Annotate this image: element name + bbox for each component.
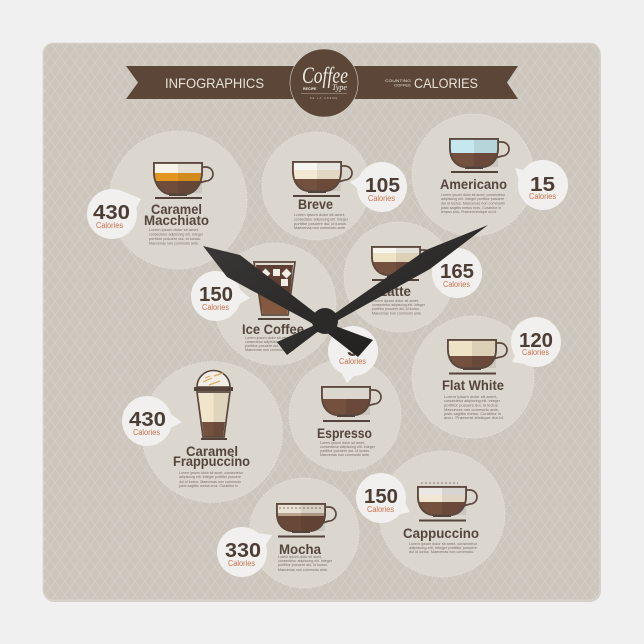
icon: frappuccino glass [194, 370, 233, 440]
description: consectetur adipiscing elit. Integer [320, 445, 376, 449]
description: Lorem ipsum dolor sit amet, [320, 441, 365, 445]
label: Breve [298, 196, 333, 212]
calorie bubble: 330: 330 [225, 540, 261, 562]
calorie bubble: 430: 430 [93, 202, 130, 224]
description: dui id luctus. Maecenas non commodo [441, 202, 505, 206]
calorie bubble: 120: Calories [522, 348, 549, 357]
calorie bubble: 105: 105 [365, 175, 400, 197]
calorie bubble: 150: 150 [199, 284, 233, 306]
description: porttitor posuere dui, id luctus. [372, 307, 420, 311]
description: tempus arcu. Praesent tristique dui id. [441, 210, 497, 214]
label: Caramel [151, 201, 202, 217]
label: Americano [440, 176, 507, 192]
label: Latte [379, 283, 411, 299]
panel: Caramel Macchiato [87, 131, 247, 269]
heading: counting coffee calories: COFFEE [394, 84, 412, 88]
logo badge: DE LA CREME [310, 96, 338, 100]
description [409, 542, 478, 554]
description: consectetur adipiscing elit. Integer [294, 218, 349, 222]
description: consectetur adipiscing elit. Integer [444, 399, 501, 403]
icon: breve cup [292, 161, 352, 197]
calorie bubble: 105 [350, 162, 407, 212]
calorie bubble: 165 [426, 248, 482, 298]
icon: latte cup [371, 246, 431, 281]
description: Lorem ipsum dolor sit amet, [372, 299, 419, 303]
label: Mocha [279, 541, 321, 557]
calorie bubble: 120 [511, 317, 561, 367]
center hub [312, 308, 338, 334]
description [320, 441, 376, 457]
logo badge: Type [332, 83, 347, 92]
description: Lorem ipsum dolor sit amet, consectetur [441, 193, 506, 197]
label: Ice Coffee [242, 321, 304, 337]
calorie bubble: 330: Calories [228, 559, 255, 568]
description: porttitor posuere dui, id luctus. [149, 237, 201, 241]
description: consectetur adipiscing elit. Integer [245, 340, 298, 344]
description: justo sagittis metus eros. Curabitur in [440, 206, 501, 210]
calorie bubble: 120: 120 [519, 330, 553, 352]
label: Espresso [317, 425, 372, 441]
description: consectetur adipiscing elit. Integer [149, 232, 204, 236]
description: dui id luctus. Maecenas non commodo. [409, 550, 474, 554]
clock hands [203, 225, 488, 357]
description: porttitor posuere dui, id luctus. [294, 222, 347, 226]
logo badge [290, 49, 358, 117]
panel: Breve [262, 132, 407, 240]
description: adipiscing elit. Integer porttitor posuere [441, 197, 504, 201]
panel: Ice Coffee [191, 243, 336, 365]
description: Maecenas non commodo ante. [444, 408, 499, 412]
icon: cappuccino cup [417, 483, 477, 522]
icon: caramel macchiato cup [153, 162, 213, 199]
description: Lorem ipsum dolor sit amet, consectetur [179, 471, 244, 475]
description [178, 471, 244, 488]
icon: americano cup [449, 138, 509, 173]
calorie bubble: 5: 5 [347, 339, 358, 361]
icon: espresso cup [321, 386, 381, 422]
description: Lorem ipsum dolor sit amet, [245, 336, 291, 340]
description [294, 213, 349, 230]
description: adipiscing elit. Integer porttitor posuere [179, 475, 241, 479]
panel: Caramel Macchiato: Macchiato [144, 212, 209, 228]
icon: iced coffee glass [254, 262, 295, 320]
panel: Cappuccino [356, 451, 505, 577]
description: porttitor posuere dui, id luctus. [444, 404, 499, 408]
description: Maecenas non commodo ante. [149, 242, 199, 246]
calorie bubble: 150: Calories [367, 505, 394, 514]
calorie bubble: 165: Calories [443, 280, 470, 289]
heading: infographics: INFOGRAPHICS [165, 76, 264, 91]
icon: mocha cup [276, 503, 336, 538]
description [149, 228, 204, 246]
description: Lorem ipsum dolor sit amet, [444, 395, 497, 399]
calorie bubble: 150 [356, 473, 410, 523]
description: justo sagittis metus eros. Curabitur in [178, 484, 238, 488]
heading: counting coffee calories: COUNTING [385, 79, 411, 83]
panel: Americano [412, 114, 568, 236]
calorie bubble: 15: Calories [529, 192, 556, 201]
description: Lorem ipsum dolor sit amet, consectetur [409, 542, 478, 546]
panel: Flat White [412, 316, 561, 438]
description: Lorem ipsum dolor sit amet, [294, 213, 345, 217]
description [245, 336, 298, 352]
calorie bubble: 5 [328, 326, 378, 383]
panel: Caramel Frappuccino [122, 362, 282, 502]
description: porttitor posuere dui, id luctus. [278, 563, 328, 567]
calorie bubble: 5: Calories [339, 357, 366, 366]
logo badge: RECIPE [303, 87, 317, 91]
description: Maecenas non commodo ante. [245, 348, 295, 352]
calorie bubble: 15 [515, 160, 568, 210]
description: Maecenas non commodo ante. [320, 453, 370, 457]
logo badge: Coffee [302, 63, 348, 88]
calorie bubble: 165: 165 [440, 261, 474, 283]
calorie bubble: 430 [122, 396, 182, 446]
heading: counting coffee calories: CALORIES [414, 76, 478, 91]
minute hand [277, 225, 488, 355]
calorie bubble: 330 [217, 527, 272, 577]
calorie bubble: 150: 150 [364, 486, 398, 508]
header ribbon [126, 49, 518, 117]
label: Cappuccino [403, 525, 479, 541]
description [372, 299, 426, 316]
label: Caramel [186, 443, 238, 459]
description [443, 395, 504, 420]
panel: Espresso [289, 326, 401, 471]
hour hand [203, 246, 373, 357]
calorie bubble: 105: Calories [368, 194, 395, 203]
calorie bubble: 430: 430 [129, 409, 166, 431]
description: consectetur adipiscing elit. Integer [278, 559, 333, 563]
description: dui id luctus. Maecenas non commodo [179, 480, 241, 484]
panel: Mocha [217, 478, 359, 588]
calorie bubble: 150: Calories [202, 303, 229, 312]
panel: Caramel Frappuccino: Frappuccino [173, 453, 250, 469]
calorie bubble: 430 [87, 189, 141, 239]
description: porttitor posuere dui, id luctus. [320, 449, 370, 453]
description: Maecenas non commodo ante. [294, 226, 346, 230]
ribbon band [126, 66, 518, 99]
description: consectetur adipiscing elit. Integer [372, 303, 426, 307]
calorie bubble: 430: Calories [96, 221, 123, 230]
label: Flat White [442, 377, 504, 393]
panel: Latte [344, 222, 482, 332]
description: Maecenas non commodo ante. [278, 568, 328, 572]
description [440, 193, 506, 214]
description: porttitor posuere dui, id luctus. [245, 344, 295, 348]
description: Lorem ipsum dolor sit amet, [149, 228, 199, 232]
description [278, 555, 333, 572]
calorie bubble: 150 [191, 271, 250, 321]
heading: counting coffee calories [385, 76, 478, 91]
calorie bubble: 430: Calories [133, 428, 160, 437]
icon: flat white cup [447, 339, 507, 374]
description: adipiscing elit. Integer porttitor posuere [409, 546, 477, 550]
calorie bubble: 15: 15 [530, 174, 555, 196]
clock board [43, 43, 601, 602]
description: Lorem ipsum dolor sit amet, [278, 555, 322, 559]
description: arcu. Praesent tristique dui id. [444, 416, 504, 420]
description: Maecenas non commodo ante. [372, 312, 422, 316]
description: justo sagittis metus. Curabitur in [443, 412, 501, 416]
